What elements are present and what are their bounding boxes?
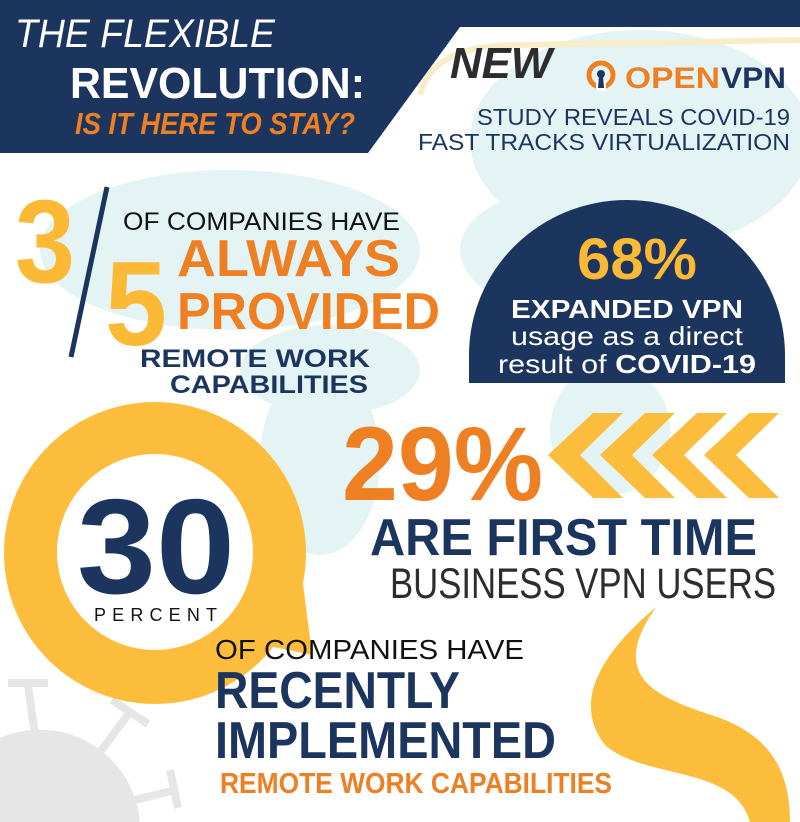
stat: 3/5 always provided: PROVIDED: [177, 283, 440, 341]
title: THE FLEXIBLE: [15, 12, 276, 56]
stat: 29% first time: ARE FIRST TIME: [370, 509, 757, 567]
yellow S curve: [591, 607, 790, 822]
stat: 3/5 always provided: ALWAYS: [177, 230, 400, 288]
dome: 68%: EXPANDED VPN: [511, 294, 743, 324]
stat: 29% first time: [342, 406, 779, 608]
header navy panel: [0, 0, 800, 153]
subtitle: STUDY REVEALS COVID-19: [477, 104, 790, 130]
title: IS IT HERE TO STAY?: [75, 106, 355, 141]
title: [15, 12, 365, 141]
yellow ring 30 percent: 30: [77, 471, 235, 622]
virus icon: [0, 683, 178, 822]
stat: 29% first time: 29%: [342, 406, 543, 523]
NEW label: NEW: [450, 39, 555, 88]
map background: [40, 30, 800, 555]
stat text: recently implemented: RECENTLY: [215, 662, 460, 720]
dome: 68%: result of COVID-19: [498, 349, 756, 379]
OpenVPN logo: [589, 62, 786, 95]
stat: 3/5 always provided: [15, 176, 440, 399]
stat: 3/5 always provided: CAPABILITIES: [170, 371, 368, 399]
stat: 3/5 always provided: OF COMPANIES HAVE: [123, 208, 400, 236]
dome: 68%: [469, 200, 785, 383]
decorative arc: [420, 40, 800, 95]
stat text: recently implemented: IMPLEMENTED: [215, 712, 556, 770]
dome: 68%: 68%: [577, 227, 697, 292]
stat: 3/5 always provided: REMOTE WORK: [140, 345, 370, 373]
subtitle: [418, 104, 790, 155]
OpenVPN logo: OPEN: [625, 62, 720, 95]
stat: 3/5 always provided: 5: [105, 237, 167, 371]
dome: 68%: usage as a direct: [511, 321, 744, 351]
stat text: recently implemented: [215, 634, 612, 800]
chevrons: [548, 413, 779, 498]
yellow ring 30 percent: PERCENT: [94, 605, 217, 625]
stat text: recently implemented: REMOTE WORK CAPABILITIES: [220, 768, 612, 800]
OpenVPN logo: VPN: [721, 62, 786, 95]
stat: 3/5 always provided: 3: [15, 176, 75, 308]
yellow ring 30 percent: [4, 402, 312, 704]
title: REVOLUTION:: [70, 59, 365, 108]
subtitle: FAST TRACKS VIRTUALIZATION: [418, 129, 790, 155]
stat text: recently implemented: OF COMPANIES HAVE: [215, 634, 524, 665]
